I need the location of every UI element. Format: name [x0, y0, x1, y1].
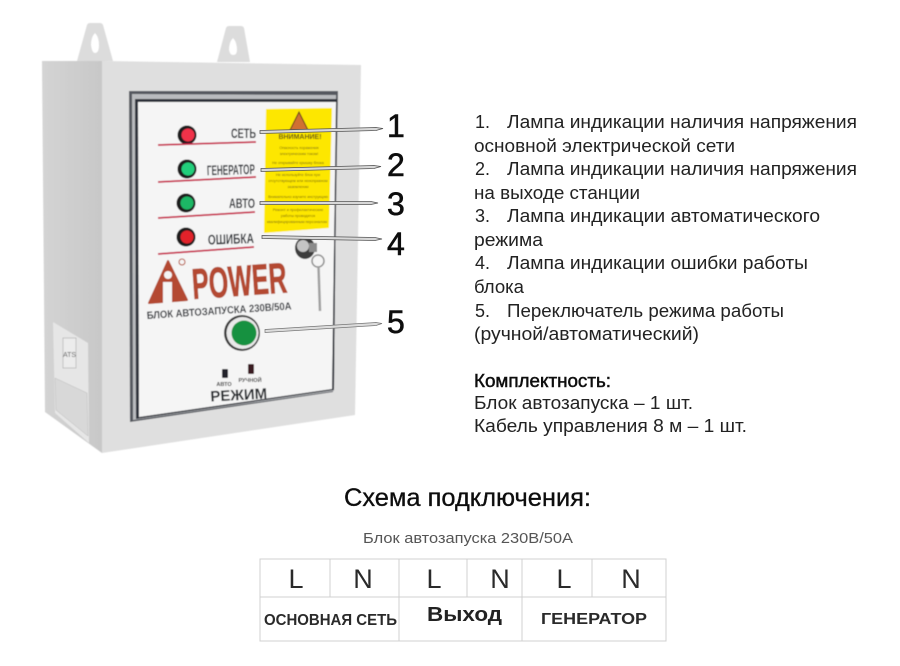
- label: mode: РЕЖИМ: [210, 386, 268, 405]
- callout numbers: 3: [387, 186, 405, 222]
- leader arrow 4: [262, 236, 382, 240]
- legend text block: 3.: [475, 206, 490, 226]
- yellow warning label: Внимательно изучите инструкцию: [268, 195, 328, 199]
- label: auto: АВТО: [216, 382, 232, 388]
- box front face: [102, 61, 361, 453]
- leader arrow 1: [260, 128, 383, 134]
- side sticker: [53, 322, 89, 443]
- group label: mains: ОСНОВНАЯ СЕТЬ: [264, 612, 397, 629]
- group label: output: Выход: [427, 604, 502, 626]
- terminal letters: L: [556, 564, 572, 594]
- leader arrow 2: [261, 166, 381, 172]
- package contents list: Блок автозапуска – 1 шт.: [474, 393, 693, 413]
- panel labels: ОШИБКА: [208, 230, 254, 248]
- box side face: [42, 61, 102, 453]
- product caption: БЛОК АВТОЗАПУСКА 230В/50А: [146, 300, 292, 322]
- legend text block: Лампа индикации ошибки работы: [507, 253, 808, 273]
- legend text block: Лампа индикации автоматического: [507, 206, 820, 226]
- legend text block: (ручной/автоматический): [474, 324, 699, 344]
- group label: generator: ГЕНЕРАТОР: [541, 611, 647, 628]
- legend text block: 1.: [475, 112, 490, 132]
- heading: wiring diagram: Схема подключения:: [344, 484, 591, 512]
- mode switch button: [224, 315, 260, 351]
- yellow warning label: электрическим током!: [280, 152, 318, 156]
- package contents list: Кабель управления 8 м – 1 шт.: [474, 416, 747, 436]
- legend text block: 2.: [475, 159, 490, 179]
- callout numbers: 1: [387, 108, 405, 144]
- leader arrow 5: [265, 322, 382, 332]
- yellow warning label: ВНИМАНИЕ!: [278, 134, 322, 141]
- icon: warning triangle: [290, 112, 308, 130]
- yellow warning label: заземлении: [288, 185, 308, 189]
- wiring table caption: Блок автозапуска 230В/50А: [363, 531, 573, 547]
- side sticker: ATS: [63, 352, 76, 359]
- yellow warning label: [264, 108, 332, 233]
- panel labels: АВТО: [229, 195, 255, 211]
- leader arrows and callout numbers: [260, 108, 405, 340]
- terminal letters: N: [621, 564, 641, 594]
- legend text block: Переключатель режима работы: [507, 301, 784, 321]
- legend text block: на выходе станции: [474, 183, 640, 203]
- lamp 2: generator: [178, 160, 196, 178]
- lamp 4: error: [176, 228, 196, 246]
- legend text block: 4.: [475, 253, 490, 273]
- terminal letters: L: [426, 564, 442, 594]
- yellow warning label: Опасность поражения: [279, 146, 319, 150]
- callout numbers: [387, 108, 405, 340]
- lamp 1: mains: [178, 126, 196, 144]
- logo: A-iPOWER: [149, 254, 288, 309]
- terminal letters: N: [353, 564, 373, 594]
- indicator: auto: [222, 369, 228, 378]
- yellow warning label: Не открывайте крышку блока: [272, 161, 325, 165]
- terminal letters: L: [288, 564, 304, 594]
- terminal letters: N: [490, 564, 510, 594]
- panel red divider lines: [158, 142, 256, 254]
- wiring terminal table: [260, 559, 666, 641]
- legend text block: Лампа индикации наличия напряжения: [507, 112, 857, 132]
- package contents list: [474, 393, 747, 436]
- legend text block: режима: [474, 230, 544, 250]
- lamp 3: auto: [176, 194, 196, 212]
- text column and wiring diagram: [260, 112, 857, 641]
- heading: package contents: Комплектность:: [474, 371, 611, 391]
- panel labels: ГЕНЕРАТОР: [207, 161, 255, 178]
- legend text block: основной электрической сети: [474, 136, 735, 156]
- icon: registered mark: [179, 259, 185, 265]
- yellow warning label: работы проводятся: [281, 214, 315, 218]
- callout numbers: 5: [387, 304, 405, 340]
- callout numbers: 4: [387, 226, 405, 262]
- logo: A-iPOWER: POWER: [190, 254, 288, 309]
- white panel: [138, 102, 336, 417]
- legend text block: 5.: [475, 301, 490, 321]
- door frame: [129, 91, 338, 422]
- yellow warning label: Ремонт и профилактические: [273, 208, 323, 212]
- icon: triangle with i: [149, 261, 187, 303]
- photo: electrical control box: [42, 23, 361, 453]
- terminal letters: [288, 564, 641, 594]
- leader arrow 3: [260, 202, 378, 204]
- label: manual: РУЧНОЙ: [238, 376, 262, 384]
- lock and key: [295, 237, 324, 311]
- yellow warning label: Не используйте блок при: [276, 173, 320, 177]
- yellow warning label: отсутствующем или неисправном: [268, 179, 328, 183]
- icon: left mounting tab: [77, 23, 113, 61]
- legend text block: [474, 112, 857, 344]
- indicator: manual: [248, 364, 254, 374]
- panel labels: [207, 125, 256, 248]
- legend text block: Лампа индикации наличия напряжения: [507, 159, 857, 179]
- panel labels: СЕТЬ: [231, 125, 256, 141]
- yellow warning label: квалифицированным персоналом: [267, 220, 327, 224]
- icon: right mounting tab: [217, 26, 250, 62]
- legend text block: блока: [474, 277, 525, 297]
- callout numbers: 2: [387, 147, 405, 183]
